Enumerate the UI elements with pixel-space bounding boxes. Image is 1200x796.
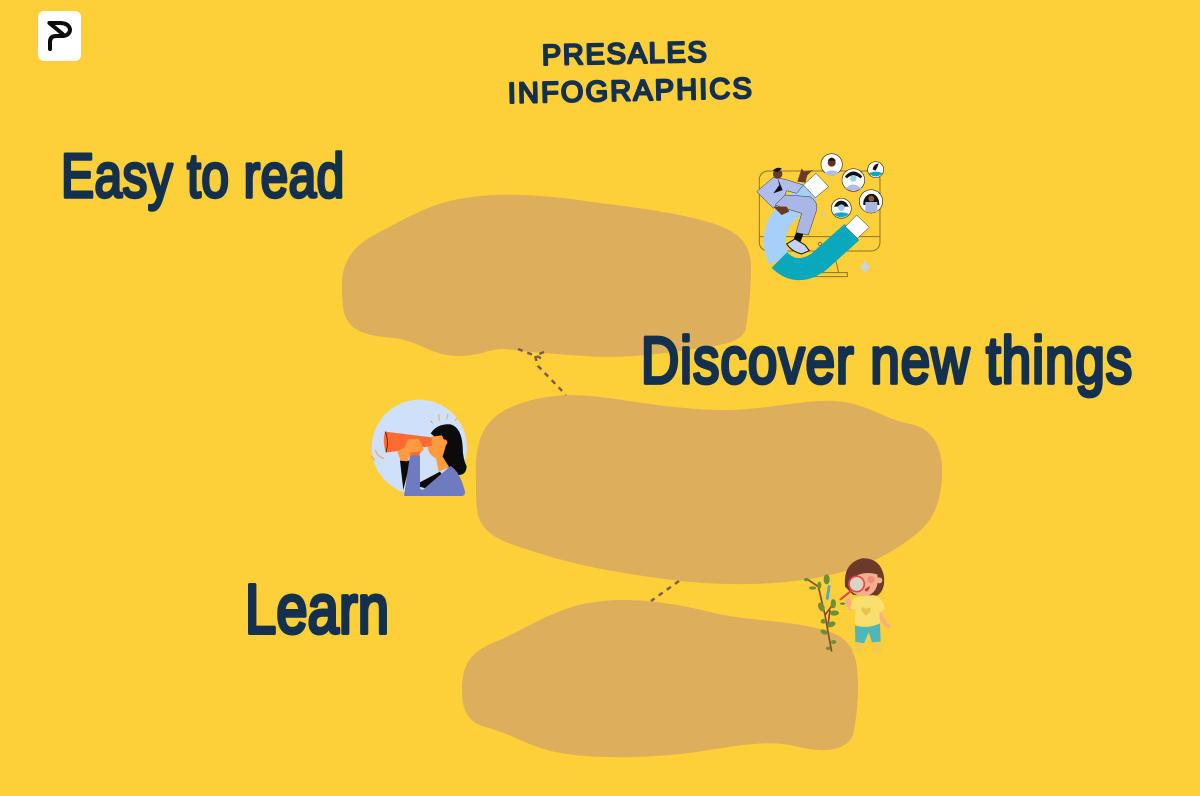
title: INFOGRAPHICS xyxy=(507,73,752,110)
shirt xyxy=(850,595,885,627)
logo badge xyxy=(38,11,81,61)
boots xyxy=(851,642,863,652)
title: PRESALES xyxy=(541,37,707,72)
man hand on knee xyxy=(773,207,789,215)
connector: dashed path between first and second blobs xyxy=(518,349,566,395)
heart on shirt xyxy=(861,607,871,616)
icon: girl with magnifying glass and plant xyxy=(804,558,891,652)
man sock and shoe xyxy=(793,233,803,242)
dark sleeve xyxy=(400,461,411,490)
magnet body xyxy=(775,190,810,260)
girl arms xyxy=(845,597,853,611)
heading: Learn: Learn xyxy=(245,571,389,648)
heading: Easy to read: Easy to read xyxy=(61,141,344,210)
hair xyxy=(845,558,884,596)
man head xyxy=(773,169,782,179)
magnet tips xyxy=(803,173,829,198)
monitor outline xyxy=(759,171,880,277)
small attraction marks xyxy=(820,213,826,231)
blob panel: bottom xyxy=(462,600,858,757)
man raised hand xyxy=(797,168,813,183)
shorts xyxy=(855,623,881,643)
caterpillar xyxy=(827,587,829,598)
blob panel: top xyxy=(342,195,751,357)
icon: man on magnet attracting customers xyxy=(757,154,884,277)
face xyxy=(849,573,878,596)
dark inner shirt xyxy=(419,472,443,489)
man leg xyxy=(775,195,817,235)
hair back xyxy=(431,424,467,475)
magnifying glass xyxy=(849,576,864,592)
neck and face xyxy=(428,435,449,472)
hand xyxy=(397,439,424,461)
heading: Discover new things: Discover new things xyxy=(641,323,1132,397)
connector: dashed path between second and third blobs xyxy=(651,581,679,601)
body xyxy=(404,455,465,496)
blob panel: middle xyxy=(476,395,942,584)
sparkle xyxy=(859,260,871,274)
plant stem xyxy=(806,578,835,652)
customer portraits xyxy=(821,154,884,218)
title xyxy=(507,37,752,110)
megaphone xyxy=(384,432,432,453)
icon: woman with megaphone xyxy=(372,400,467,496)
man torso xyxy=(757,177,803,208)
man tie xyxy=(773,177,783,193)
plant leaves xyxy=(804,574,845,650)
sound marks xyxy=(372,414,457,461)
